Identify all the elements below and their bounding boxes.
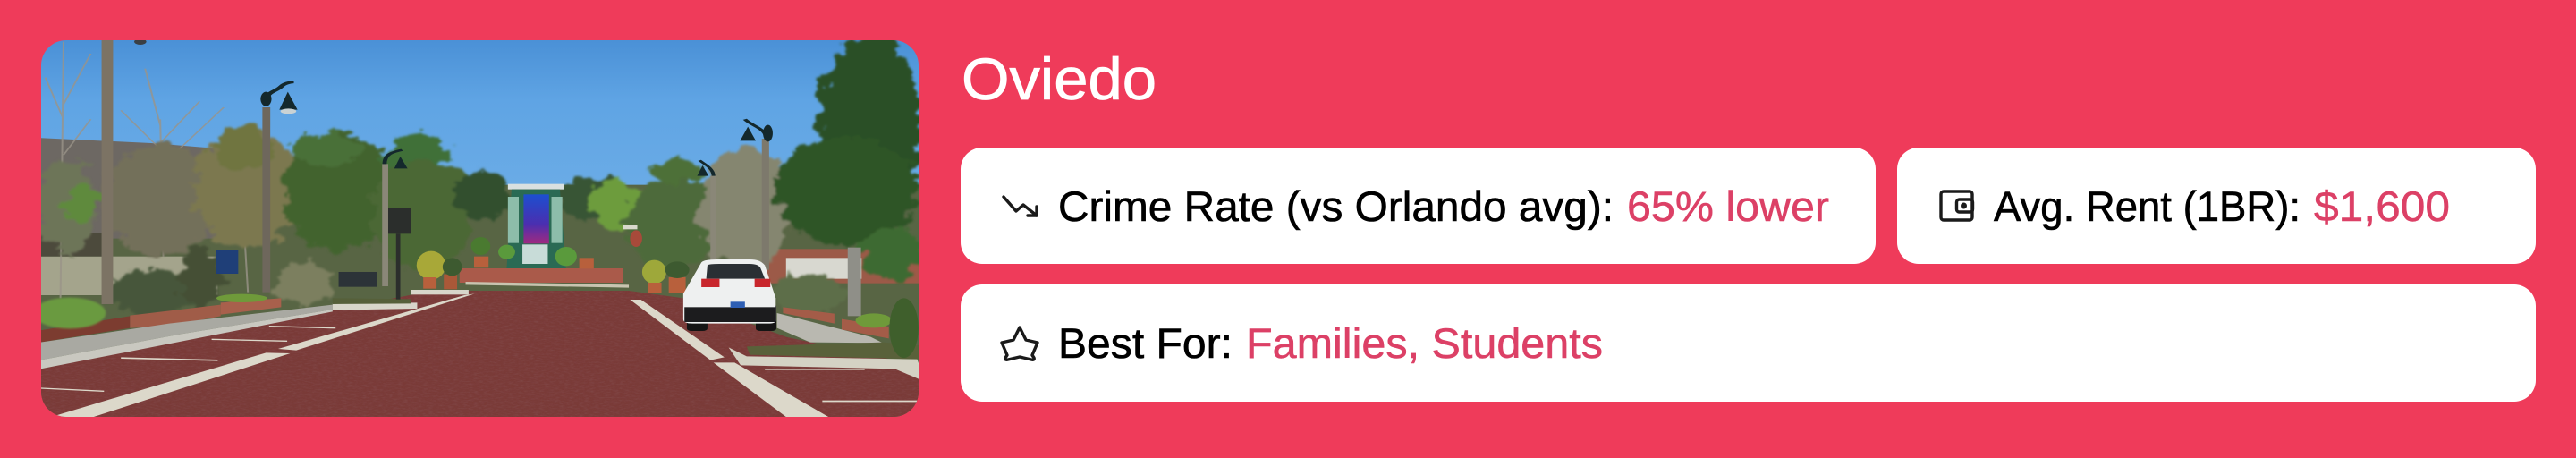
card: crime rate <box>961 148 1876 264</box>
potted plants <box>33 237 690 328</box>
sky <box>37 38 925 194</box>
best for value: Families, Students <box>1246 319 1603 367</box>
bare branches <box>45 41 249 299</box>
card: average rent <box>1897 148 2536 264</box>
street stripes <box>41 293 917 417</box>
right island and curb <box>729 298 925 382</box>
street surface <box>37 282 925 420</box>
rent label: Avg. Rent (1BR): <box>1994 182 2301 230</box>
left planter and curb <box>37 290 469 369</box>
icon: trending down <box>1004 197 1037 216</box>
rent value: $1,600 <box>2314 182 2450 230</box>
card: best for <box>961 284 2536 402</box>
background buildings and ground <box>37 138 925 420</box>
icon: star <box>1002 327 1038 360</box>
white car <box>683 259 776 331</box>
lamp posts <box>102 38 861 316</box>
icon: wallet <box>1941 191 1973 220</box>
crime rate value: 65% lower <box>1627 182 1829 230</box>
bench and signs <box>216 208 642 300</box>
infographic card <box>41 40 2536 417</box>
best for label: Best For: <box>1058 319 1233 367</box>
foliage <box>37 36 922 318</box>
photo: Oviedo brick street <box>33 36 925 420</box>
title: Oviedo <box>962 46 1157 112</box>
crime rate label: Crime Rate (vs Orlando avg): <box>1058 182 1614 230</box>
town kiosk sign <box>460 184 623 283</box>
